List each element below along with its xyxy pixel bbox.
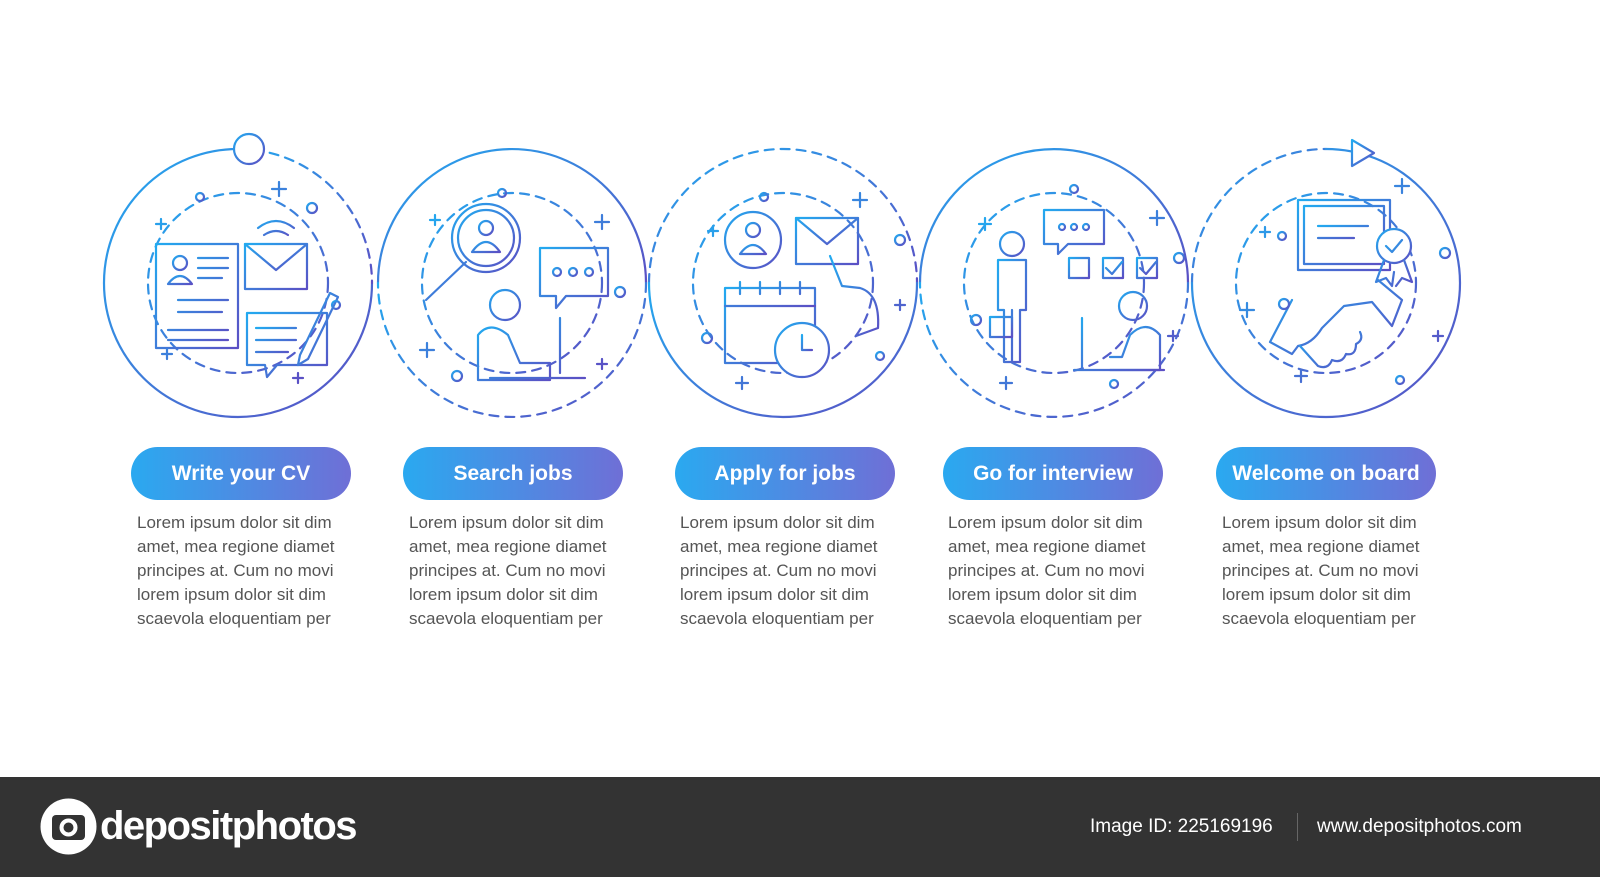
step 2 label: Search jobs [453,462,573,485]
footer image id: Image ID: 225169196 [1090,816,1273,837]
footer bar [0,777,1600,877]
step 3 text: Lorem ipsum dolor sit dim amet, mea regione diamet principes at. Cum no movi lorem ipsum dolor sit dim scaevola eloquentiam per [680,513,878,628]
step 2 text: Lorem ipsum dolor sit dim amet, mea regione diamet principes at. Cum no movi lorem ipsum dolor sit dim scaevola eloquentiam per [409,513,606,628]
step 5 text: Lorem ipsum dolor sit dim amet, mea regione diamet principes at. Cum no movi lorem ipsum dolor sit dim scaevola eloquentiam per [1222,513,1420,628]
step 5 label: Welcome on board [1232,462,1420,485]
circle 3: apply for jobs [649,149,917,417]
footer logo: depositphotos [100,804,356,848]
step 1 label [131,447,351,500]
step 5 label [1216,447,1436,500]
circle 2: search jobs [378,149,646,417]
diagram: five step circles [102,132,1462,418]
step 3 label: Apply for jobs [714,462,856,485]
circle 4: go for interview [920,149,1188,417]
step 2 label [403,447,623,500]
step 4 label [943,447,1163,500]
footer url [1297,813,1522,841]
step 4 label: Go for interview [973,462,1133,485]
step 1 label: Write your CV [172,462,310,485]
circle 5: welcome on board [1192,140,1460,417]
step 3 label [675,447,895,500]
footer url: www.depositphotos.com [1317,816,1522,837]
circle 1: write CV [104,134,372,417]
footer logo [40,798,356,854]
step 4 text: Lorem ipsum dolor sit dim amet, mea regione diamet principes at. Cum no movi lorem ipsum dolor sit dim scaevola eloquentiam per [948,513,1146,628]
step 1 text: Lorem ipsum dolor sit dim amet, mea regione diamet principes at. Cum no movi lorem ipsum dolor sit dim scaevola eloquentiam per [137,513,334,628]
